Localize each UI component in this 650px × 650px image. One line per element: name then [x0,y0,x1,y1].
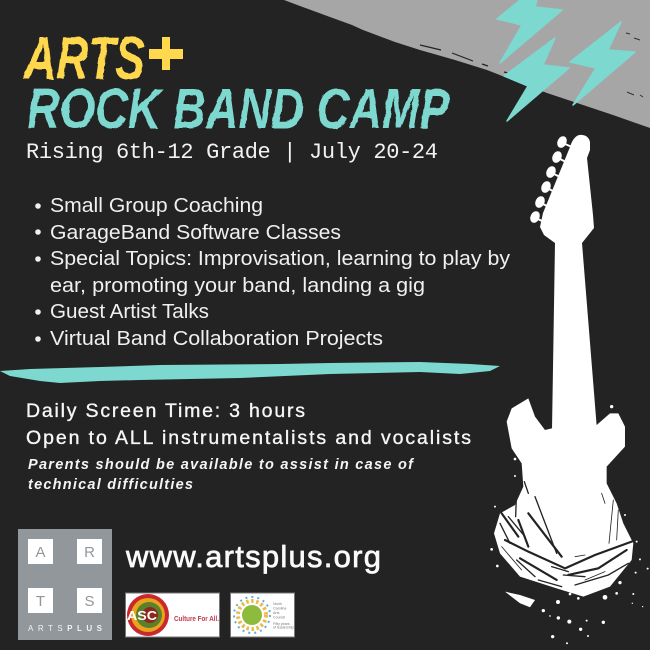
bullet list: Virtual Band Collaboration Projects [50,327,383,350]
bullet list: Guest Artist Talks [50,300,209,323]
logo letter tiles [28,539,102,613]
icon: lightning bolts [497,0,635,121]
title: Arts+: ARTS [23,25,145,92]
title: Rock Band Camp: ROCK BAND CAMP [27,77,451,141]
logo: North Carolina Arts Council: Arts [273,611,280,615]
teal brush divider [0,362,500,383]
logo: North Carolina Arts Council [230,593,294,637]
info: screen time: Daily Screen Time: 3 hours [26,400,305,422]
logo: ASC Culture For All: Culture For All. [174,616,219,623]
bullet list: GarageBand Software Classes [50,221,341,244]
logo: North Carolina Arts Council: Council [273,616,285,620]
logo: North Carolina Arts Council: Carolina [273,606,286,610]
logo letter tiles: T [36,593,45,610]
guitar body [490,398,649,644]
grey brush corner [284,0,650,128]
guitar headstock and neck [540,135,597,430]
logo wordmark: ARTS PLUS [28,624,103,633]
bullet list [35,194,511,350]
note: parents: Parents should be available to assist in case of [28,457,415,473]
logo: North Carolina Arts Council: Fifty years [273,622,290,626]
note: parents [28,457,415,493]
bullet list: Special Topics: Improvisation, learning to play by [50,247,511,270]
guitar silhouette [490,135,649,644]
note: parents: technical difficulties [28,477,193,493]
bullet list: Small Group Coaching [50,194,263,217]
logo: North Carolina Arts Council: North [273,602,282,606]
logo letter tiles: S [84,593,95,610]
logo: Arts Plus [18,529,112,640]
bullet list: ear, promoting your band, landing a gig [50,274,425,297]
guitar paint specks [490,405,649,644]
logo: North Carolina Arts Council: of leadership [273,626,294,630]
logo letter tiles: R [84,544,95,561]
info: open to all: Open to ALL instrumentalists and vocalists [26,427,471,449]
logo: ASC Culture For All [126,593,220,637]
website url: www.artsplus.org [125,539,381,574]
logo letter tiles: A [35,544,46,561]
guitar tuning pegs [528,135,572,224]
logo: ASC Culture For All: ASC [127,608,158,623]
subtitle: grade and dates: Rising 6th-12 Grade | July 20-24 [26,140,438,165]
